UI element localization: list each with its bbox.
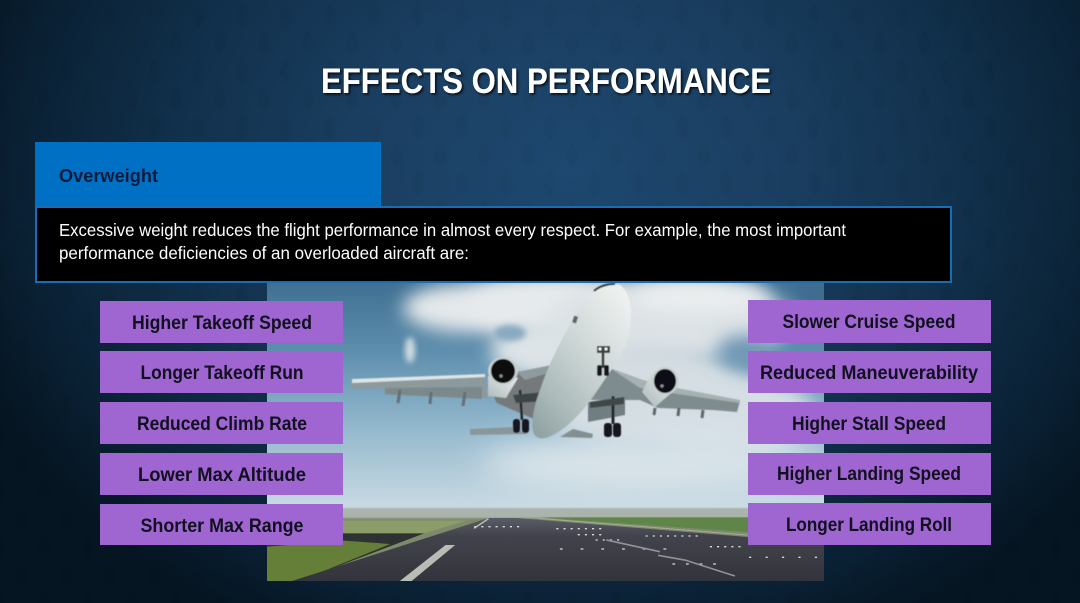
sky	[267, 282, 824, 517]
panel: description	[36, 207, 951, 282]
item: higher landing speed: Higher Landing Speed	[777, 464, 961, 485]
item: reduced maneuverability: Reduced Maneuverability	[760, 363, 978, 384]
nose gear	[597, 346, 610, 376]
item: higher stall speed	[748, 402, 991, 444]
left landing gear	[512, 390, 539, 434]
left list: takeoff and climb effects	[100, 301, 343, 545]
cockpit window	[594, 284, 615, 291]
left engine	[488, 357, 518, 398]
right engine	[642, 367, 678, 407]
item: higher landing speed	[748, 453, 991, 495]
clouds	[403, 273, 833, 495]
right landing gear	[590, 396, 624, 437]
item: lower max altitude	[100, 453, 343, 495]
fuselage	[532, 284, 631, 438]
item: slower cruise speed: Slower Cruise Speed	[782, 312, 956, 333]
right wing	[588, 366, 740, 422]
item: longer takeoff run: Longer Takeoff Run	[140, 363, 304, 384]
airplane	[352, 284, 740, 438]
item: higher stall speed: Higher Stall Speed	[792, 414, 946, 435]
item: higher takeoff speed: Higher Takeoff Speed	[132, 313, 312, 334]
item: higher takeoff speed	[100, 301, 343, 343]
item: longer landing roll: Longer Landing Roll	[786, 515, 952, 536]
item: reduced climb rate: Reduced Climb Rate	[137, 414, 307, 435]
title: EFFECTS ON PERFORMANCE	[321, 62, 771, 101]
right list: cruise and landing effects	[748, 300, 991, 545]
description text: Excessive weight reduces the flight performance in almost every respect. For example, the most important	[59, 220, 846, 240]
left wing	[352, 364, 557, 420]
item: longer takeoff run	[100, 351, 343, 393]
door	[572, 316, 578, 323]
item: longer landing roll	[748, 503, 991, 545]
right tailplane	[560, 429, 593, 438]
ground	[267, 508, 824, 584]
item: slower cruise speed	[748, 300, 991, 343]
description text: performance deficiencies of an overloaded aircraft are:	[59, 243, 469, 263]
item: shorter max range: Shorter Max Range	[140, 516, 304, 537]
heading: overweight: Overweight	[59, 165, 158, 186]
item: reduced climb rate	[100, 402, 343, 444]
photo: airplane taking off	[267, 273, 833, 584]
panel: overweight header	[35, 142, 381, 207]
item: reduced maneuverability	[748, 351, 991, 393]
item: shorter max range	[100, 504, 343, 545]
description text	[59, 220, 846, 263]
item: lower max altitude: Lower Max Altitude	[138, 465, 306, 486]
left tailplane	[470, 427, 528, 435]
